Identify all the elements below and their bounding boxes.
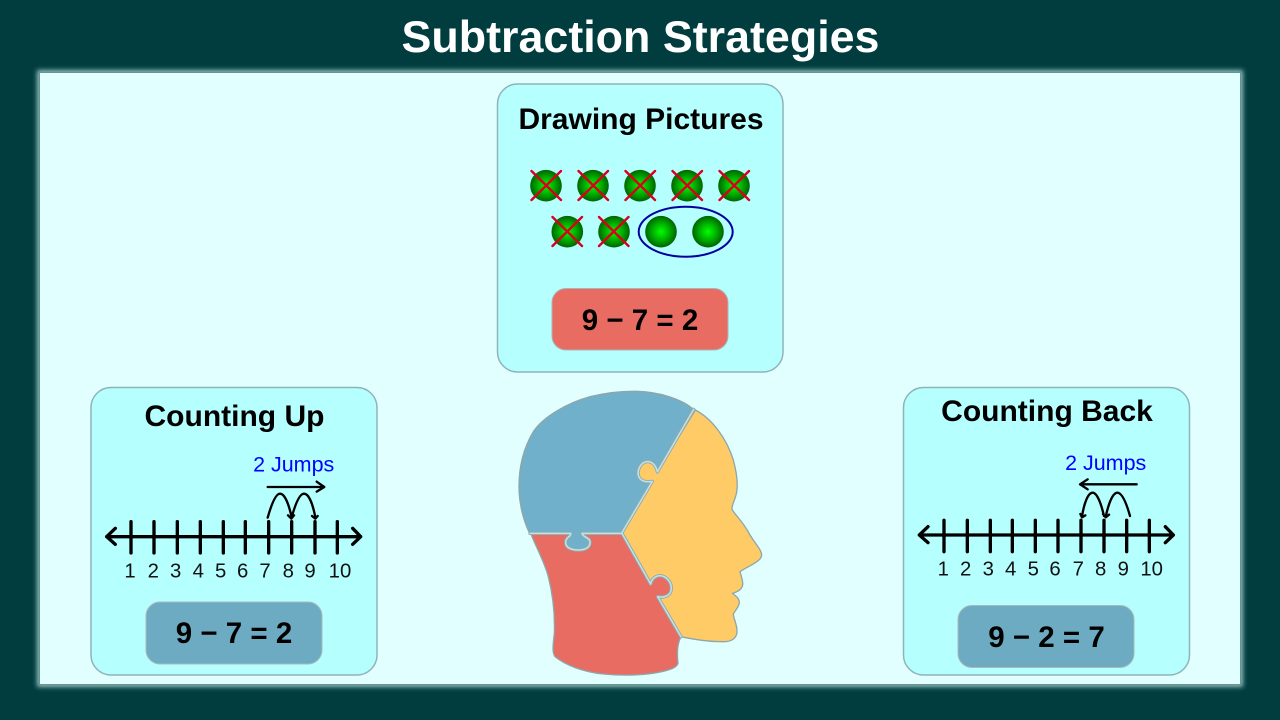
number line: counting back: 9: [1118, 559, 1129, 581]
number line: counting up: [107, 453, 361, 582]
arrow: direction forward: [268, 482, 324, 492]
puzzle piece: red neck: [531, 533, 681, 675]
number line: counting up: 4: [193, 560, 204, 582]
number line: counting up: 5: [215, 560, 226, 582]
panel: counting up: [91, 388, 377, 675]
equation: counting back: [958, 606, 1134, 668]
puzzle piece: yellow face: [622, 410, 762, 642]
number line: counting up: 3: [170, 560, 181, 582]
head puzzle illustration: [519, 391, 762, 675]
heading: drawing pictures: Drawing Pictures: [518, 103, 764, 136]
equation: drawing pictures: [552, 288, 728, 350]
number line: counting back: 6: [1049, 559, 1061, 581]
equation: counting up: 9 − 7 = 2: [176, 617, 292, 650]
number line: counting up: 1: [124, 560, 136, 582]
dots: crossed out and circled: [530, 170, 750, 257]
number line: counting back: 3: [983, 559, 994, 581]
number line: counting back: 4: [1005, 559, 1016, 581]
panel: counting back: [904, 388, 1190, 675]
equation: counting back: 9 − 2 = 7: [988, 621, 1105, 654]
label: 2 jumps: 2 Jumps: [1065, 451, 1146, 475]
puzzle seams: [530, 409, 694, 637]
jump arcs: [268, 494, 318, 519]
number line: counting up: 7: [259, 560, 271, 582]
number line: counting up: 9: [304, 560, 316, 582]
number line: counting back: 8: [1095, 559, 1106, 581]
heading: counting up: Counting Up: [145, 400, 324, 433]
jump arcs: [1080, 493, 1130, 517]
panel: drawing pictures: [498, 84, 783, 372]
number line: counting up: 8: [283, 560, 294, 582]
number line: counting back: 5: [1028, 559, 1039, 581]
puzzle piece: blue cranium: [519, 391, 692, 550]
equation: counting up: [146, 602, 322, 664]
number line: counting back: 2: [960, 559, 971, 581]
number line: counting up: 10: [329, 560, 351, 582]
number line: counting back: 10: [1140, 559, 1163, 581]
equation: drawing pictures: 9 − 7 = 2: [582, 304, 698, 337]
number line: counting back: [919, 451, 1173, 581]
label: 2 jumps: 2 Jumps: [253, 453, 334, 477]
number line: counting up: 2: [148, 560, 159, 582]
arrow: direction backward: [1080, 479, 1137, 489]
number line: counting back: 7: [1073, 559, 1084, 581]
number line: counting up: 6: [237, 560, 248, 582]
number line: counting back: 1: [938, 559, 949, 581]
title: Subtraction Strategies: [402, 12, 879, 62]
heading: counting back: Counting Back: [941, 395, 1153, 428]
